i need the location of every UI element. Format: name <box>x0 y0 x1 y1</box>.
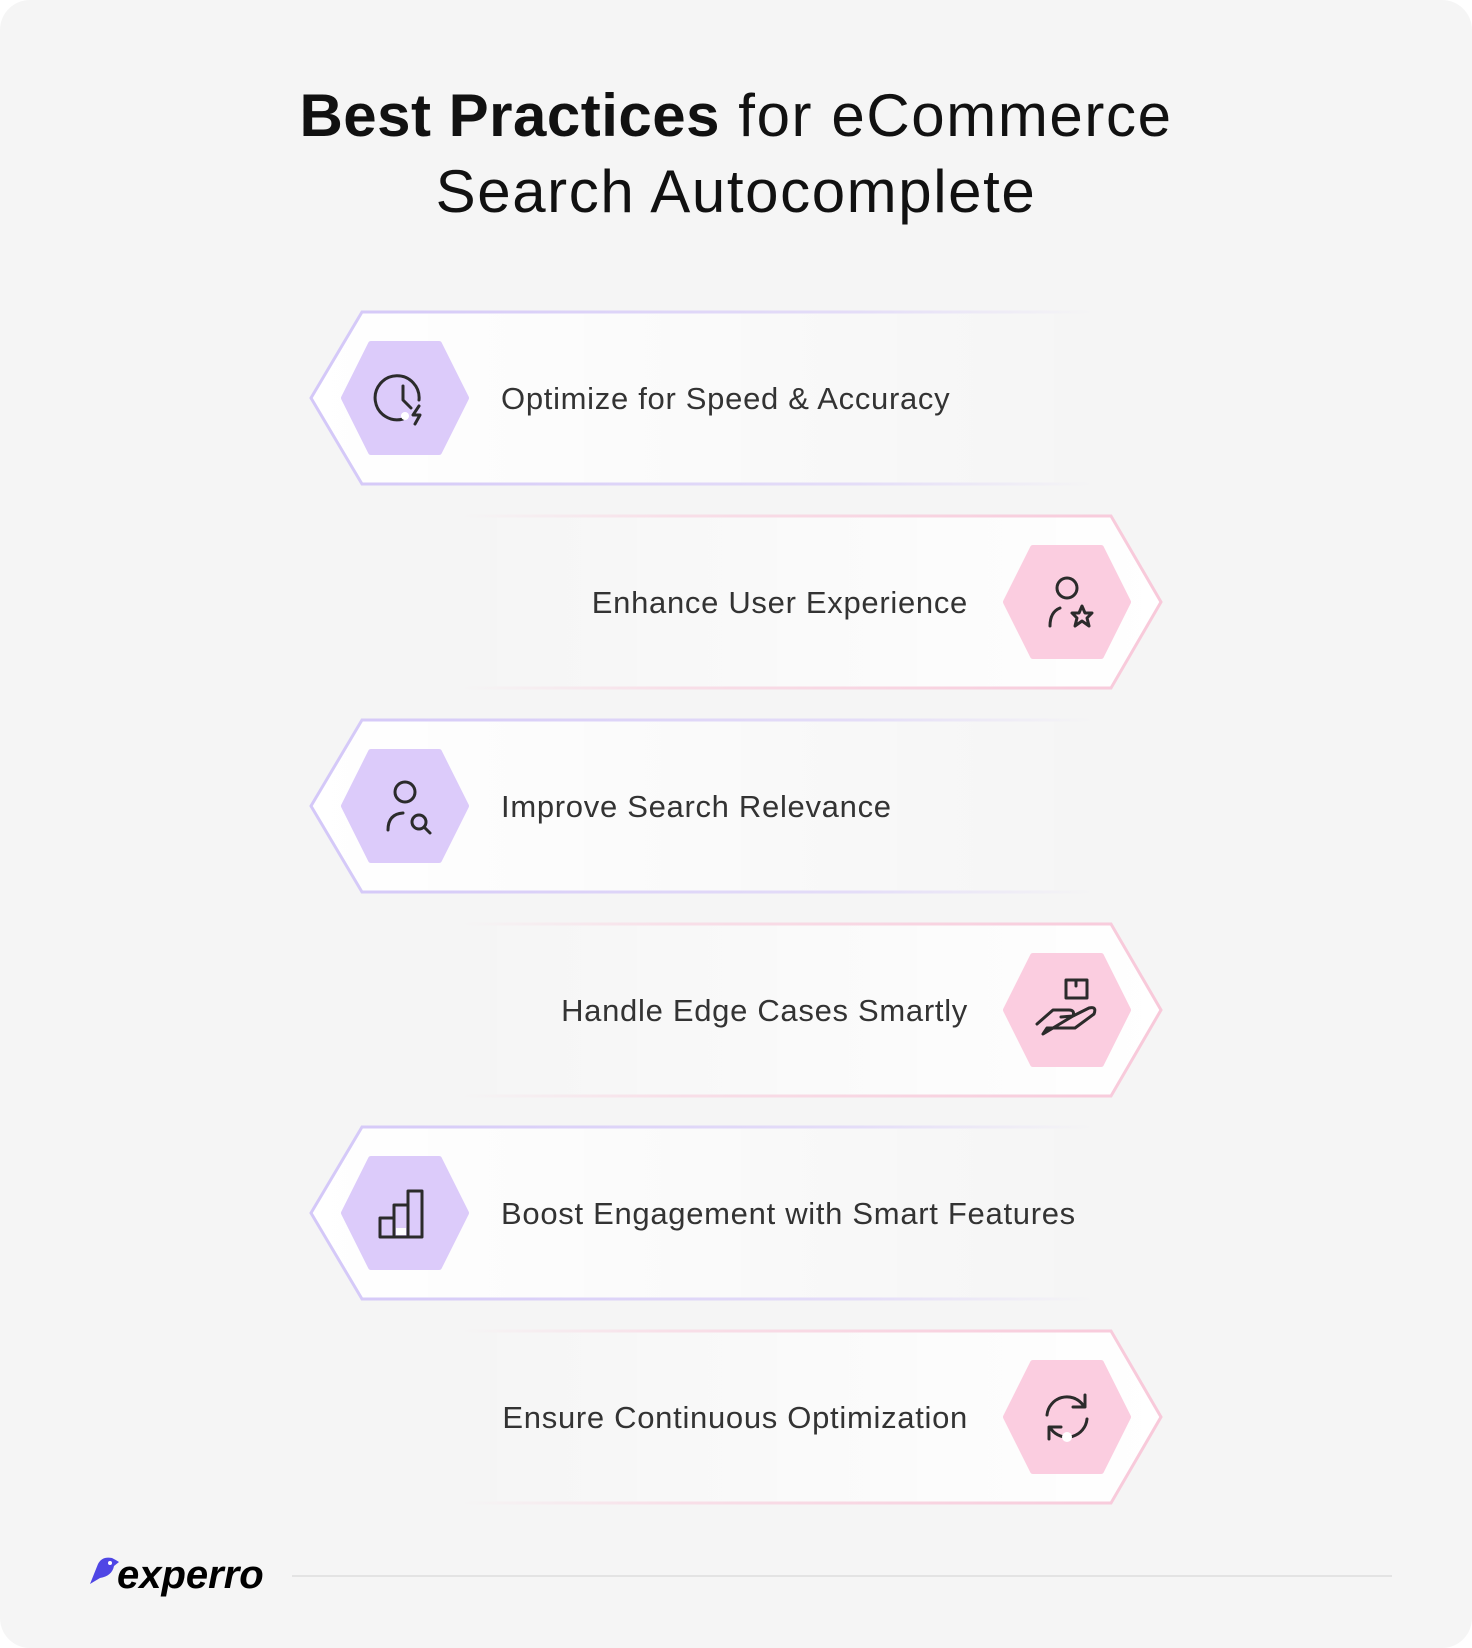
card 3 <box>311 720 1093 892</box>
card 5 <box>311 1127 1093 1299</box>
card 1 <box>311 312 1093 484</box>
icon: user star <box>1050 578 1092 626</box>
title: Search Autocomplete <box>436 158 1036 225</box>
footer line <box>292 1575 1392 1577</box>
label 1: Optimize for Speed & Accuracy <box>501 381 950 416</box>
label 2: Enhance User Experience <box>592 585 968 620</box>
icon: user search <box>388 782 430 833</box>
icon: bar chart <box>380 1191 422 1237</box>
card 4 <box>462 924 1161 1096</box>
label 6: Ensure Continuous Optimization <box>502 1400 968 1435</box>
title <box>299 82 1173 225</box>
card 2 <box>462 516 1161 688</box>
label 4: Handle Edge Cases Smartly <box>561 993 968 1028</box>
icon: clock lightning <box>375 376 420 424</box>
icon: refresh <box>1047 1395 1087 1442</box>
card 6 <box>462 1331 1161 1503</box>
icon: hand box <box>1037 980 1095 1034</box>
logo: experro <box>117 1553 264 1597</box>
label 3: Improve Search Relevance <box>501 789 892 824</box>
title: Best Practices for eCommerce <box>299 82 1173 149</box>
label 5: Boost Engagement with Smart Features <box>501 1196 1076 1231</box>
